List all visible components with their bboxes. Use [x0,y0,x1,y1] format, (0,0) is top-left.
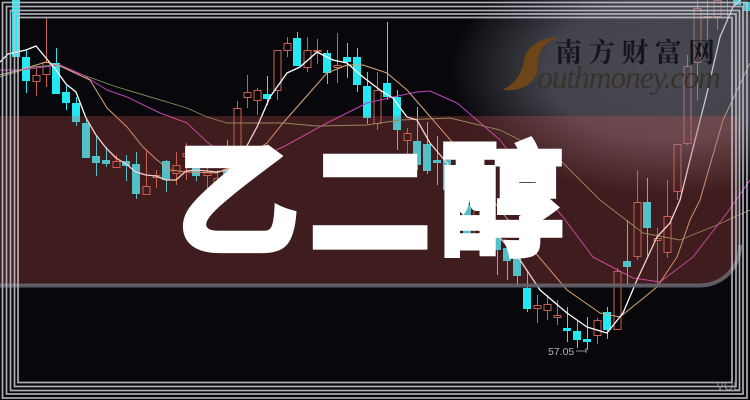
panel border [0,245,740,286]
line: tan MA [0,62,750,317]
background glow behind watermark [440,0,750,210]
line: olive MA [0,65,750,240]
watermark: southmoney logo: 南方财富网 [555,37,715,68]
volume label: VOL [716,379,740,393]
watermark: southmoney logo [502,37,721,95]
panel: translucent maroon title band [0,116,740,286]
low price label [548,346,586,358]
icon: logo swoosh [502,37,559,90]
low price label: 57.05 [548,346,574,358]
red candles [33,0,728,344]
watermark: southmoney logo: outhmoney.com [537,59,721,95]
line: magenta MA [0,65,750,282]
title: 乙二醇 [175,101,564,281]
